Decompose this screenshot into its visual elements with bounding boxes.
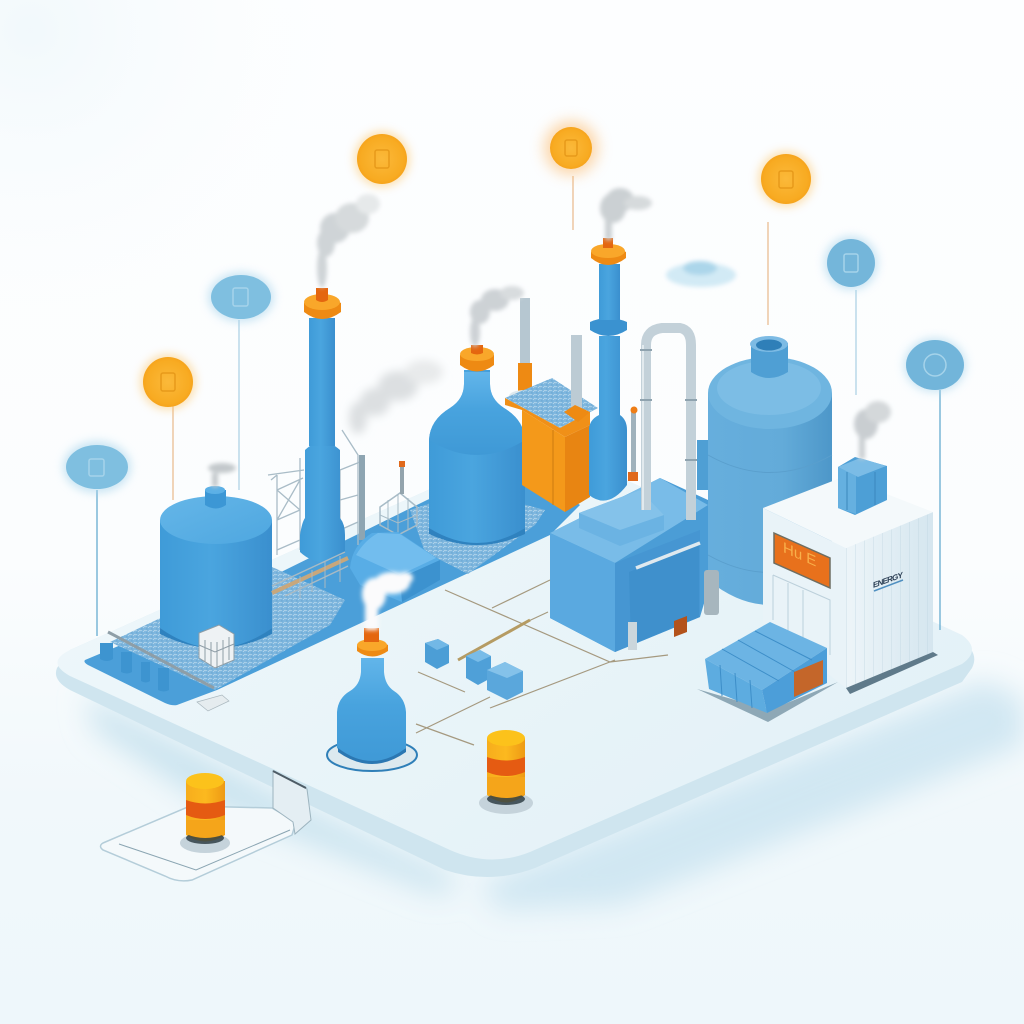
smoke: left chimney [317,194,380,288]
lattice tower [268,430,360,555]
smoke: front bottle [362,572,413,630]
blue callout: far left [63,441,131,493]
small blue boxes [425,639,523,700]
door panels [773,575,830,655]
orange display sign [774,533,830,588]
orange callout: left [140,354,196,410]
smoke: large bottle [470,286,524,347]
arched pipes [640,328,697,520]
floor conduit lines [416,580,668,745]
upper step [579,490,664,546]
barrel [180,773,230,853]
smoke: right chimney [600,188,652,240]
white building [763,477,938,694]
white rail [636,543,700,568]
plate [100,806,296,881]
company label: ENERGY [873,570,903,590]
small orange-tipped valve [628,406,638,481]
hinge tab [273,771,311,834]
smoke plumes [208,188,891,630]
platform shadows [85,680,1024,910]
left equipment cage [199,625,234,668]
smoke: left tank [208,463,236,487]
blue callout: upper left [208,272,274,322]
blue callout: far right [904,338,966,392]
base platform [56,440,974,877]
blue callout: right [824,236,878,290]
conveyor [272,552,348,598]
blue ramp shed [697,622,838,722]
grey leg [628,622,637,650]
tall chimney right [589,238,627,501]
smoke: faint mast [349,360,443,434]
cloud icon [666,261,736,287]
tall chimney left [300,288,345,562]
roof vent box [838,457,887,515]
orange callout: top centre [544,121,598,175]
small cylinders [100,643,169,692]
orange display sign: Hu E [783,540,816,570]
orange equipment box [505,298,598,512]
left storage tank [160,486,272,649]
blue floor strip [84,462,580,711]
smoke: roof vent [854,401,891,459]
upright pipe [564,335,590,422]
flap plate with barrel [100,771,311,881]
small grey device [197,695,229,711]
orange doorway [674,616,687,637]
orange callout: top right [758,151,814,207]
front bottle tank [327,628,417,771]
orange grille [794,660,823,697]
front barrel [479,730,533,814]
blue machine block [550,440,708,652]
callout stems [97,176,940,636]
pipe mast and cage [359,455,417,540]
bent exhaust pipe [509,298,541,402]
grey pump [704,570,719,615]
orange callout: top left [354,131,410,187]
horizontal blue tank [350,532,440,602]
rail [108,632,214,688]
large blue bottle tank [429,345,525,545]
large right tank [708,336,832,605]
